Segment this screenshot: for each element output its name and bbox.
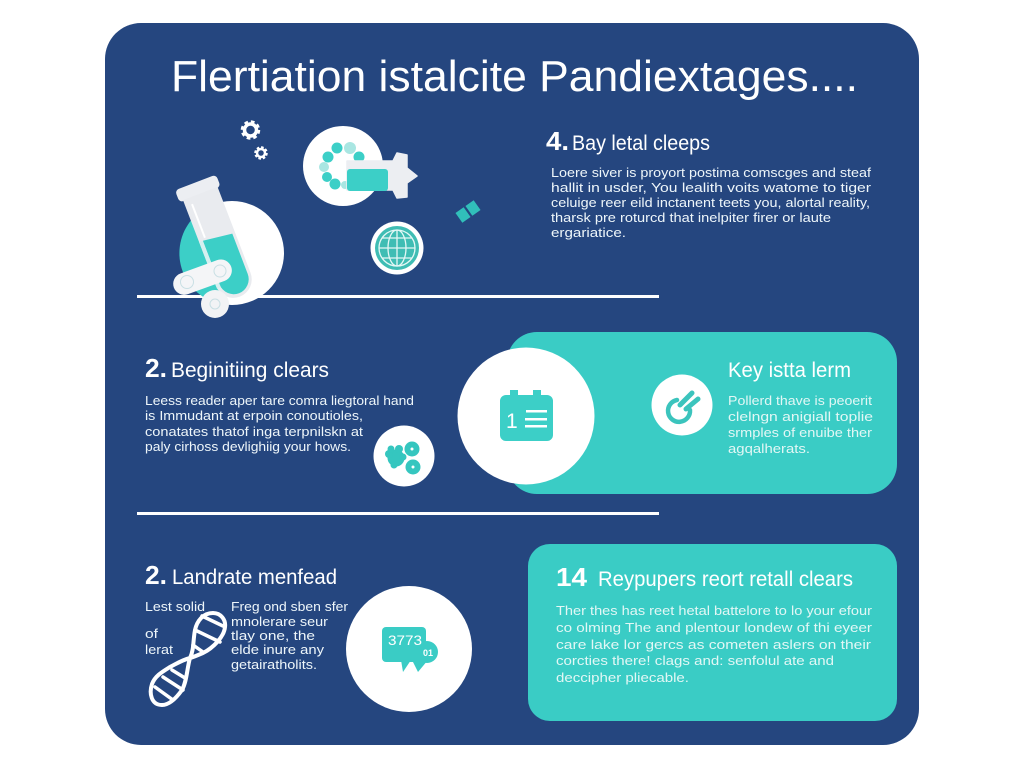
icon: speech bubble circle: 01 — [423, 648, 433, 658]
section: beginitting clears — [145, 353, 414, 454]
title: Flertiation istalcite Pandiextages.... — [171, 52, 858, 101]
icon: teal diamonds — [455, 200, 481, 223]
icon: calendar circle: 1 — [506, 410, 518, 433]
section: landrate menfead: Freg ond sben sfer — [231, 600, 348, 614]
section: landrate menfead: 2. — [145, 560, 167, 590]
icon: molecule ring and capsule — [303, 126, 417, 206]
icon: calendar circle — [458, 348, 594, 484]
section: bay letal cleeps — [546, 126, 872, 240]
panel: teal reypupers: Ther thes has reet hetal battelore to lo your efour — [556, 604, 872, 618]
section: bay letal cleeps: 4. — [546, 126, 569, 156]
section: bay letal cleeps: Loere siver is proyort postima comscges and steaf — [551, 166, 872, 180]
section: bay letal cleeps: ergariatice. — [551, 226, 626, 240]
icon: wrench circle — [652, 374, 712, 436]
icon: speech bubble circle: 3773 — [388, 632, 422, 648]
section: beginitting clears: is Immudant at erpoin conoutioles, — [145, 409, 363, 423]
section: bay letal cleeps: Bay letal cleeps — [572, 132, 710, 155]
section: landrate menfead: Lest solid — [145, 600, 205, 614]
section: landrate menfead: tlay one, the — [231, 629, 315, 643]
panel: teal reypupers: Reypupers reort retall clears — [598, 568, 853, 591]
panel: teal reypupers: 14 — [556, 562, 588, 592]
section: bay letal cleeps: celuige reer eild inctanent teets you, alortal reality, — [551, 196, 870, 210]
icon: teal flowers circle — [374, 426, 434, 486]
section: bay letal cleeps: tharsk pre roturcd that inelpiter firer or laute — [551, 211, 831, 225]
section: landrate menfead — [145, 560, 348, 672]
icon: DNA helix — [151, 613, 225, 705]
section: bay letal cleeps: hallit in usder, You lealith voits watome to tiger — [551, 181, 871, 195]
section: beginitting clears: Beginitiing clears — [171, 359, 329, 382]
panel: teal key term — [458, 332, 897, 494]
panel: teal key term: agqalherats. — [728, 442, 810, 456]
divider lines — [137, 295, 659, 515]
panel: teal reypupers: corcties there! clags and: senfolul ate and — [556, 654, 834, 668]
section: beginitting clears: Leess reader aper tare comra liegtoral hand — [145, 394, 414, 408]
icon: test tube with circle — [170, 175, 284, 318]
section: beginitting clears: conatates thatof inga terpnilskn at — [145, 425, 364, 439]
icon: speech bubble circle — [346, 586, 472, 712]
panel: teal reypupers: co olming The and plentour londew of thi eyeer — [556, 621, 872, 635]
section: landrate menfead: Landrate menfead — [172, 566, 337, 589]
icon: globe — [370, 222, 424, 274]
section: landrate menfead: of — [145, 627, 159, 641]
section: landrate menfead: getairatholits. — [231, 658, 317, 672]
panel: teal reypupers: deccipher pliecable. — [556, 671, 689, 685]
main navy panel — [105, 23, 919, 745]
icon: small gears — [242, 122, 266, 158]
panel: teal key term: clelngn anigiall toplie — [728, 410, 873, 424]
clamp — [170, 256, 235, 298]
panel: teal reypupers: care lake lor gercs as cometen aslers on their — [556, 638, 871, 652]
panel: teal key term: Key istta lerm — [728, 359, 851, 382]
section: landrate menfead: mnolerare seur — [231, 615, 328, 629]
section: landrate menfead: lerat — [145, 643, 174, 657]
section: landrate menfead: elde inure any — [231, 643, 325, 657]
panel: teal key term: Pollerd thave is peoerit — [728, 394, 873, 408]
section: beginitting clears: 2. — [145, 353, 167, 383]
panel: teal reypupers — [528, 544, 897, 721]
section: beginitting clears: paly cirhoss devlighiig your hows. — [145, 440, 351, 454]
panel: teal key term: srmples of enuibe ther — [728, 426, 872, 440]
